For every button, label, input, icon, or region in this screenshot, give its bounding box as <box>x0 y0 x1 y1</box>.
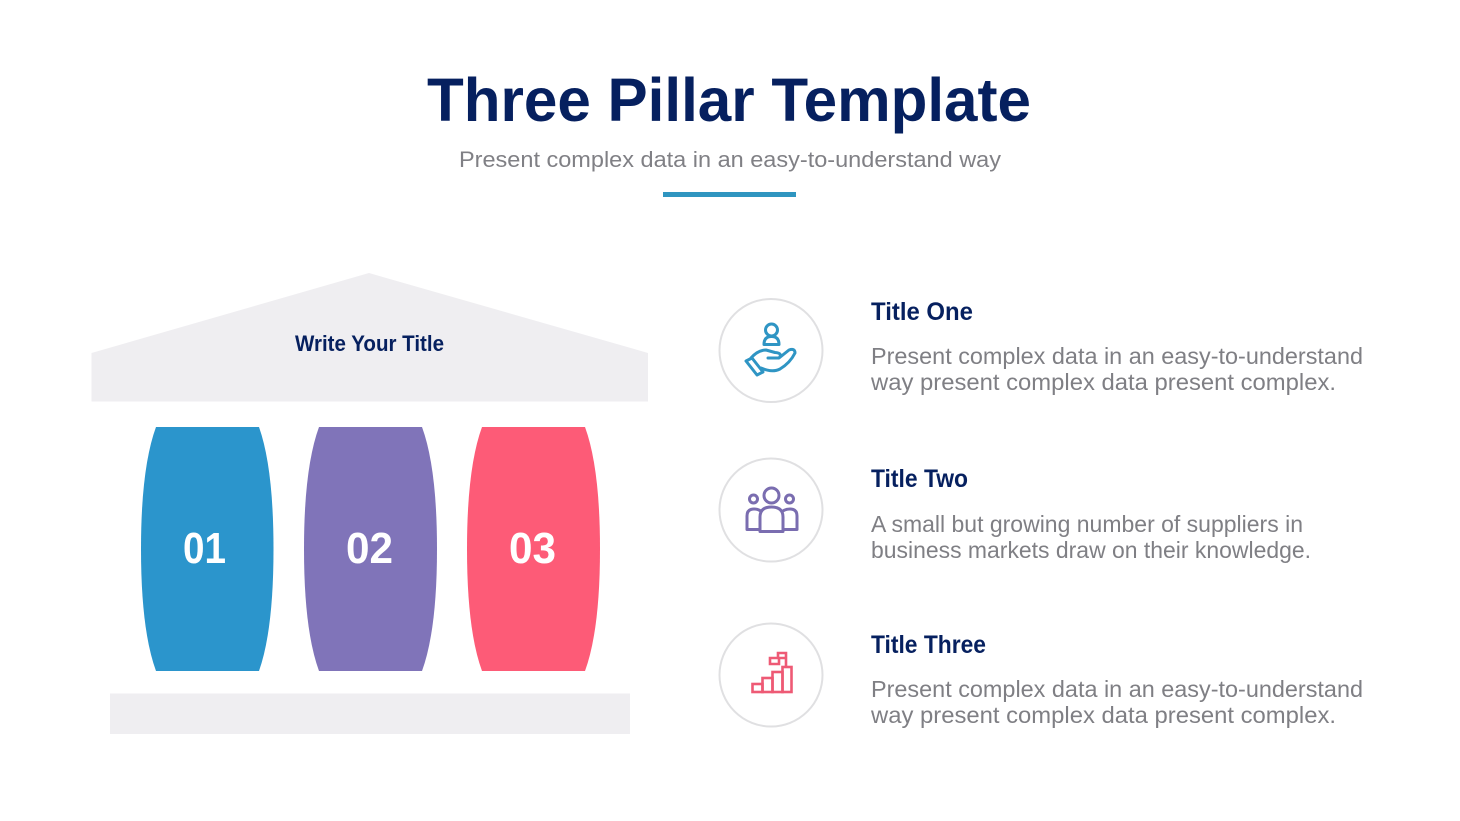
pillar 03 <box>467 427 600 671</box>
description <box>870 343 1363 395</box>
roof title: Write Your Title <box>295 331 444 356</box>
description <box>871 511 1311 563</box>
heading: Title One <box>871 298 973 326</box>
pillar 02: 02 <box>346 524 393 573</box>
description: way present complex data present complex. <box>870 369 1336 395</box>
description: Present complex data in an easy-to-understand <box>871 676 1363 702</box>
heading: Title Two <box>871 465 968 493</box>
description: way present complex data present complex. <box>870 702 1336 728</box>
item: title three <box>720 624 1363 728</box>
icon: hand holding person <box>720 299 822 402</box>
accent underline <box>663 192 796 197</box>
subtitle: Present complex data in an easy-to-understand way <box>459 147 1002 172</box>
heading: Title Three <box>871 631 986 659</box>
pillar 03: 03 <box>509 524 556 573</box>
description: A small but growing number of suppliers in <box>871 511 1303 537</box>
item: title one <box>720 298 1363 402</box>
pillar 01 <box>141 427 274 671</box>
temple base <box>110 694 630 734</box>
pillar 02 <box>304 427 437 671</box>
item: title two <box>720 458 1311 563</box>
panel: temple diagram <box>92 273 648 734</box>
icon: steps with flag <box>720 624 822 726</box>
temple roof <box>92 273 648 402</box>
icon: group of people <box>720 458 822 562</box>
description <box>870 676 1363 728</box>
description: Present complex data in an easy-to-understand <box>871 343 1363 369</box>
pillar 01: 01 <box>183 524 226 573</box>
description: business markets draw on their knowledge. <box>871 537 1311 563</box>
title: Three Pillar Template <box>427 66 1031 134</box>
